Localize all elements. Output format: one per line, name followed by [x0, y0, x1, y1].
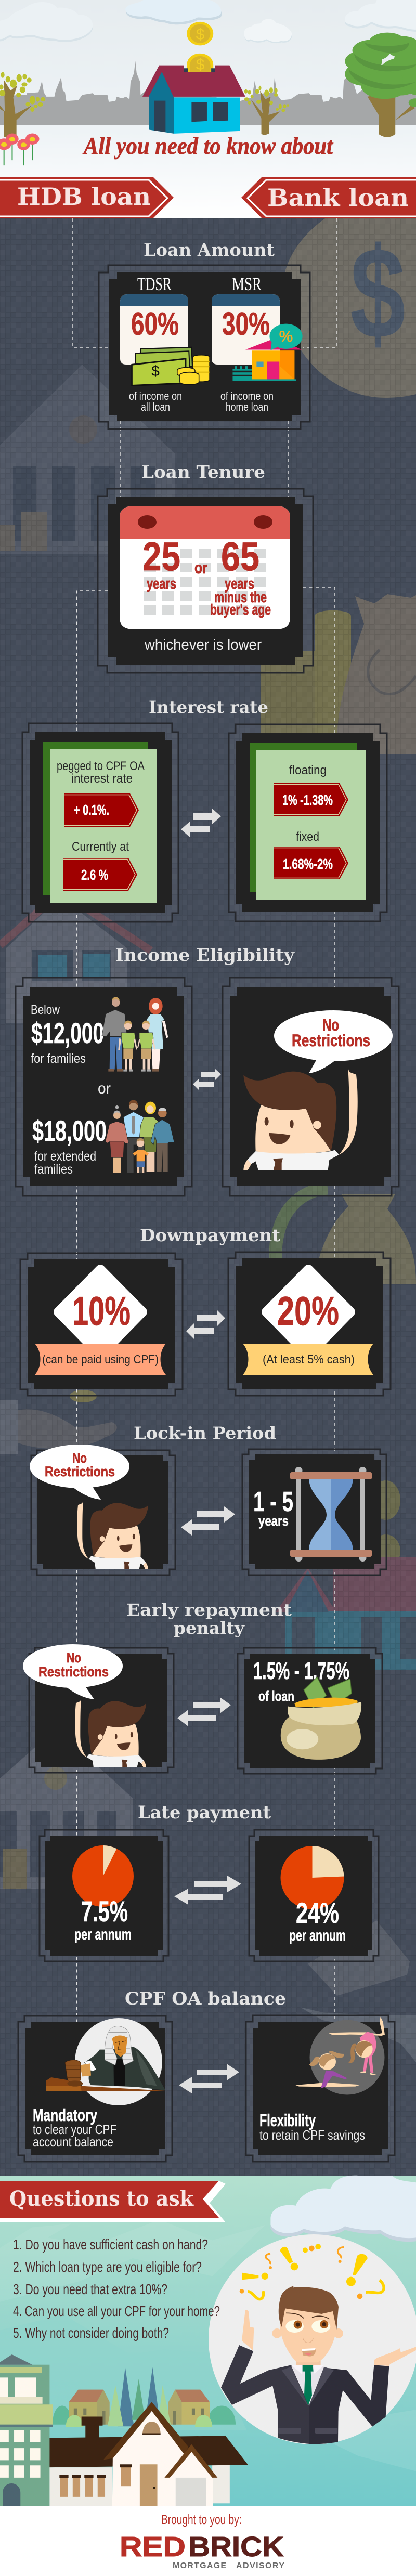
HDB loan label: HDB loan [17, 183, 151, 211]
No Restrictions: Restrictions [292, 1031, 370, 1050]
per annum: per annum [74, 1926, 132, 1943]
1 - 5 years: 1 - 5 [253, 1486, 293, 1517]
10 percent: 10% [72, 1288, 131, 1334]
icon: judge with gavel [46, 2026, 165, 2091]
caption MSR [220, 389, 274, 413]
arrows: exchange early repayment [177, 1697, 231, 1726]
ribbon: paid using CPF [35, 1344, 166, 1375]
question list: 5. Why not consider doing both? [13, 2325, 169, 2341]
25: 25 [142, 534, 180, 579]
heading: Early repayment penalty [126, 1600, 292, 1638]
header background [0, 0, 416, 218]
years: years [147, 576, 176, 592]
pegged text: interest rate [71, 772, 133, 786]
ribbon: paid using CPF: (can be paid using CPF) [42, 1352, 159, 1366]
ribbon plus 0.1 [64, 793, 139, 827]
No Restrictions: No [72, 1450, 87, 1466]
per annum: per annum [289, 1927, 346, 1944]
years minus the buyer's age: minus the [214, 589, 267, 606]
1 - 5 years: years [258, 1513, 289, 1529]
panel: bank CPF [246, 2015, 395, 2162]
coin entering slot [187, 54, 213, 72]
mountains [0, 2220, 416, 2471]
question list: 1. Do you have sufficient cash on hand? [13, 2236, 208, 2253]
No Restrictions [45, 1450, 115, 1479]
or: or [98, 1080, 111, 1097]
Mandatory text [33, 2105, 116, 2150]
dashed connector lines [72, 218, 337, 2022]
logo: Redbrick Mortgage Advisory: RED [120, 2531, 186, 2562]
heading: Loan Amount: Loan Amount [144, 240, 275, 260]
floating: floating [289, 763, 327, 777]
Flexibility text: Flexibility [259, 2111, 316, 2130]
logo: Redbrick Mortgage Advisory: ADVISORY [236, 2561, 284, 2570]
icon: money and coins [132, 347, 210, 385]
banner: Questions to ask [0, 2181, 226, 2222]
heading: Lock-in Period: Lock-in Period [134, 1423, 276, 1443]
apartment block [0, 2354, 53, 2506]
ribbon: at least 5 percent cash: (At least 5% cash) [263, 1352, 355, 1366]
heading: Downpayment: Downpayment [140, 1225, 281, 1245]
Mandatory text: to clear your CPF [33, 2122, 116, 2137]
years minus the buyer's age [210, 576, 271, 618]
24 percent: 24% [296, 1896, 339, 1929]
cartoon man mirrored [77, 1501, 148, 1569]
arrows: exchange late payment [174, 1876, 241, 1905]
house grey lower [0, 1729, 133, 1889]
speech bubble [30, 1445, 129, 1500]
panel: HDB CPF [18, 2016, 172, 2162]
house teal [276, 1557, 416, 1670]
ribbon fixed rate [274, 847, 348, 879]
card MSR [212, 294, 280, 365]
panel: bank downpayment [228, 1252, 391, 1396]
icon: family [102, 997, 174, 1173]
ribbon 2.6: 2.6 % [81, 867, 108, 883]
house silhouette with coins [0, 365, 175, 554]
caption TDSR: of income on [129, 389, 182, 402]
question list: 4. Can you use all your CPF for your home? [13, 2303, 220, 2319]
arrows: exchange lock-in [181, 1506, 235, 1536]
cloud right [345, 0, 416, 32]
background motifs [0, 218, 416, 2062]
Bank loan label: Bank loan [267, 184, 409, 212]
Mandatory text: account balance [33, 2134, 113, 2150]
arrows: exchange CPF [179, 2064, 239, 2093]
logo: Redbrick Mortgage Advisory: BRICK [188, 2531, 284, 2562]
bushes and distant village [53, 2367, 236, 2427]
heading: CPF OA balance: CPF OA balance [125, 1988, 286, 2009]
banknote [308, 1920, 410, 1996]
cartoon man [243, 1068, 358, 1170]
pegged text: pegged to CPF OA [57, 759, 145, 773]
cloud [270, 2176, 416, 2242]
heading: Late payment: Late payment [138, 1802, 271, 1823]
No Restrictions: Restrictions [45, 1464, 115, 1479]
ribbon: at least 5 percent cash [243, 1344, 373, 1375]
panel: HDB lock-in [30, 1445, 175, 1575]
question list [13, 2236, 220, 2341]
question list: 3. Do you need that extra 10%? [13, 2281, 167, 2297]
hand with coin [0, 1390, 117, 1454]
Flexibility text [259, 2111, 365, 2143]
cloud middle [244, 19, 292, 43]
TDSR label: TDSR [137, 274, 172, 294]
icon: money sack [281, 1677, 361, 1760]
icon: hourglass [290, 1467, 372, 1562]
coin stack and money bag [261, 594, 416, 754]
panel: HDB downpayment [20, 1253, 183, 1396]
diamond [266, 1269, 350, 1355]
title: All you need to know about [82, 133, 334, 160]
ribbon floating rate: 1% -1.38% [282, 792, 333, 808]
speech bubble [274, 1010, 393, 1073]
circle backdrop [310, 2020, 385, 2094]
coin falling [187, 22, 213, 45]
panel: HDB late payment [40, 1830, 168, 1961]
footer section background [0, 2176, 416, 2506]
tree left [0, 72, 45, 137]
percent symbol: % [279, 328, 293, 345]
panel: HDB early repayment [23, 1644, 174, 1773]
coin dollar signs [196, 26, 205, 73]
coins right [371, 1480, 400, 1568]
for extended families [34, 1149, 96, 1177]
cloud top center [125, 0, 222, 24]
cartoon man mirrored [75, 1699, 146, 1767]
panel: bank lock-in [242, 1449, 386, 1575]
No Restrictions: No [67, 1650, 81, 1666]
No Restrictions: No [322, 1016, 339, 1034]
caption MSR: home loan [226, 400, 268, 413]
heading: Loan Tenure: Loan Tenure [141, 462, 265, 482]
panel: loan amount [99, 265, 310, 429]
penalty rate: 1.5% - 1.75% [253, 1657, 349, 1684]
dark textured background [0, 218, 416, 2176]
65: 65 [221, 534, 259, 579]
logo: Redbrick Mortgage Advisory: MORTGAGE [173, 2561, 226, 2570]
heading: Early repayment penalty: Early repayment [126, 1600, 292, 1620]
icon: gymnasts [295, 2016, 385, 2089]
ribbon fixed rate: 1.68%-2% [283, 856, 333, 872]
panel: bank income [223, 978, 399, 1196]
banner: HDB loan [0, 177, 174, 218]
ribbon floating rate [274, 783, 348, 816]
exclamation and question marks [240, 2244, 384, 2299]
7.5 percent: 7.5% [81, 1895, 128, 1928]
card TDSR [120, 294, 188, 365]
tree center [244, 86, 289, 135]
header illustration: house, coins, skyline, trees [0, 0, 416, 165]
No Restrictions [38, 1650, 109, 1680]
heading: Income Eligibility: Income Eligibility [115, 945, 295, 965]
panel: bank late payment [249, 1830, 379, 1961]
heading: Interest rate: Interest rate [149, 697, 268, 717]
logo: Redbrick Mortgage Advisory [120, 2531, 284, 2570]
for families: for families [31, 1051, 86, 1066]
heading: Early repayment penalty: penalty [174, 1618, 245, 1638]
or: or [194, 560, 207, 577]
footer illustration: mountains, cloud, buildings [0, 2176, 416, 2506]
money bag with green band [276, 1188, 416, 1284]
whichever is lower: whichever is lower [144, 635, 262, 654]
dollar on banknote: $ [151, 363, 160, 379]
arrows: exchange downpayment [186, 1310, 225, 1339]
for extended families: for extended [34, 1149, 96, 1164]
arrows: exchange interest [181, 809, 221, 837]
banner label: Questions to ask [9, 2187, 194, 2211]
question list: 2. Which loan type are you eligible for? [13, 2259, 202, 2275]
Below: Below [31, 1003, 60, 1017]
panel: HDB interest [22, 723, 178, 922]
diamond [58, 1269, 142, 1355]
12,000: $12,000 [31, 1017, 104, 1049]
cloud left [0, 2, 93, 42]
years minus the buyer's age: buyer's age [210, 602, 271, 618]
pie chart 7.5 [72, 1845, 134, 1907]
pegged text [57, 759, 145, 786]
hand lower right [300, 2007, 416, 2062]
arrows: exchange income [193, 1069, 221, 1090]
ribbon 2.6 [63, 858, 137, 891]
panel: HDB income [16, 978, 192, 1196]
caption TDSR: all loan [141, 400, 170, 413]
caption TDSR [129, 389, 182, 413]
fixed: fixed [296, 830, 319, 844]
flowers [0, 134, 40, 165]
banner: Bank loan [241, 177, 416, 218]
60 percent: 60% [131, 306, 179, 342]
panel: loan tenure [98, 489, 313, 673]
caption MSR: of income on [220, 389, 274, 402]
coloured house [0, 892, 151, 1023]
30 percent: 30% [222, 306, 270, 342]
of loan: of loan [258, 1688, 294, 1704]
background tile texture [0, 218, 416, 2176]
for extended families: families [34, 1162, 73, 1177]
years minus the buyer's age: years [225, 576, 254, 592]
coin dollar signs: $ [196, 56, 205, 73]
circle backdrop [75, 2018, 162, 2105]
calendar [120, 506, 290, 629]
18,000: $18,000 [32, 1114, 107, 1147]
panel: bank early repayment [238, 1648, 382, 1774]
white footer strip [0, 2506, 416, 2576]
main house [49, 2402, 248, 2506]
No Restrictions [292, 1016, 370, 1050]
house piggy bank [142, 66, 245, 134]
20 percent: 20% [277, 1288, 339, 1334]
panel: bank interest [229, 724, 387, 921]
Flexibility text: to retain CPF savings [259, 2127, 365, 2143]
MSR label: MSR [232, 274, 262, 294]
1 - 5 years [253, 1486, 293, 1529]
city skyline [0, 61, 416, 125]
Mandatory text: Mandatory [33, 2105, 97, 2125]
pie chart 24 [281, 1846, 344, 1909]
No Restrictions: Restrictions [38, 1664, 109, 1680]
ribbon plus 0.1: + 0.1%. [74, 802, 109, 818]
icon: house with percent bubble [232, 324, 303, 381]
Brought to you by: Brought to you by: [161, 2512, 242, 2527]
Currently at: Currently at [72, 840, 129, 854]
speech bubble [23, 1644, 123, 1699]
thinking man in circle [209, 2234, 416, 2444]
coin dollar signs: $ [196, 26, 205, 43]
money bag top right [282, 218, 416, 398]
tree right [345, 33, 416, 137]
